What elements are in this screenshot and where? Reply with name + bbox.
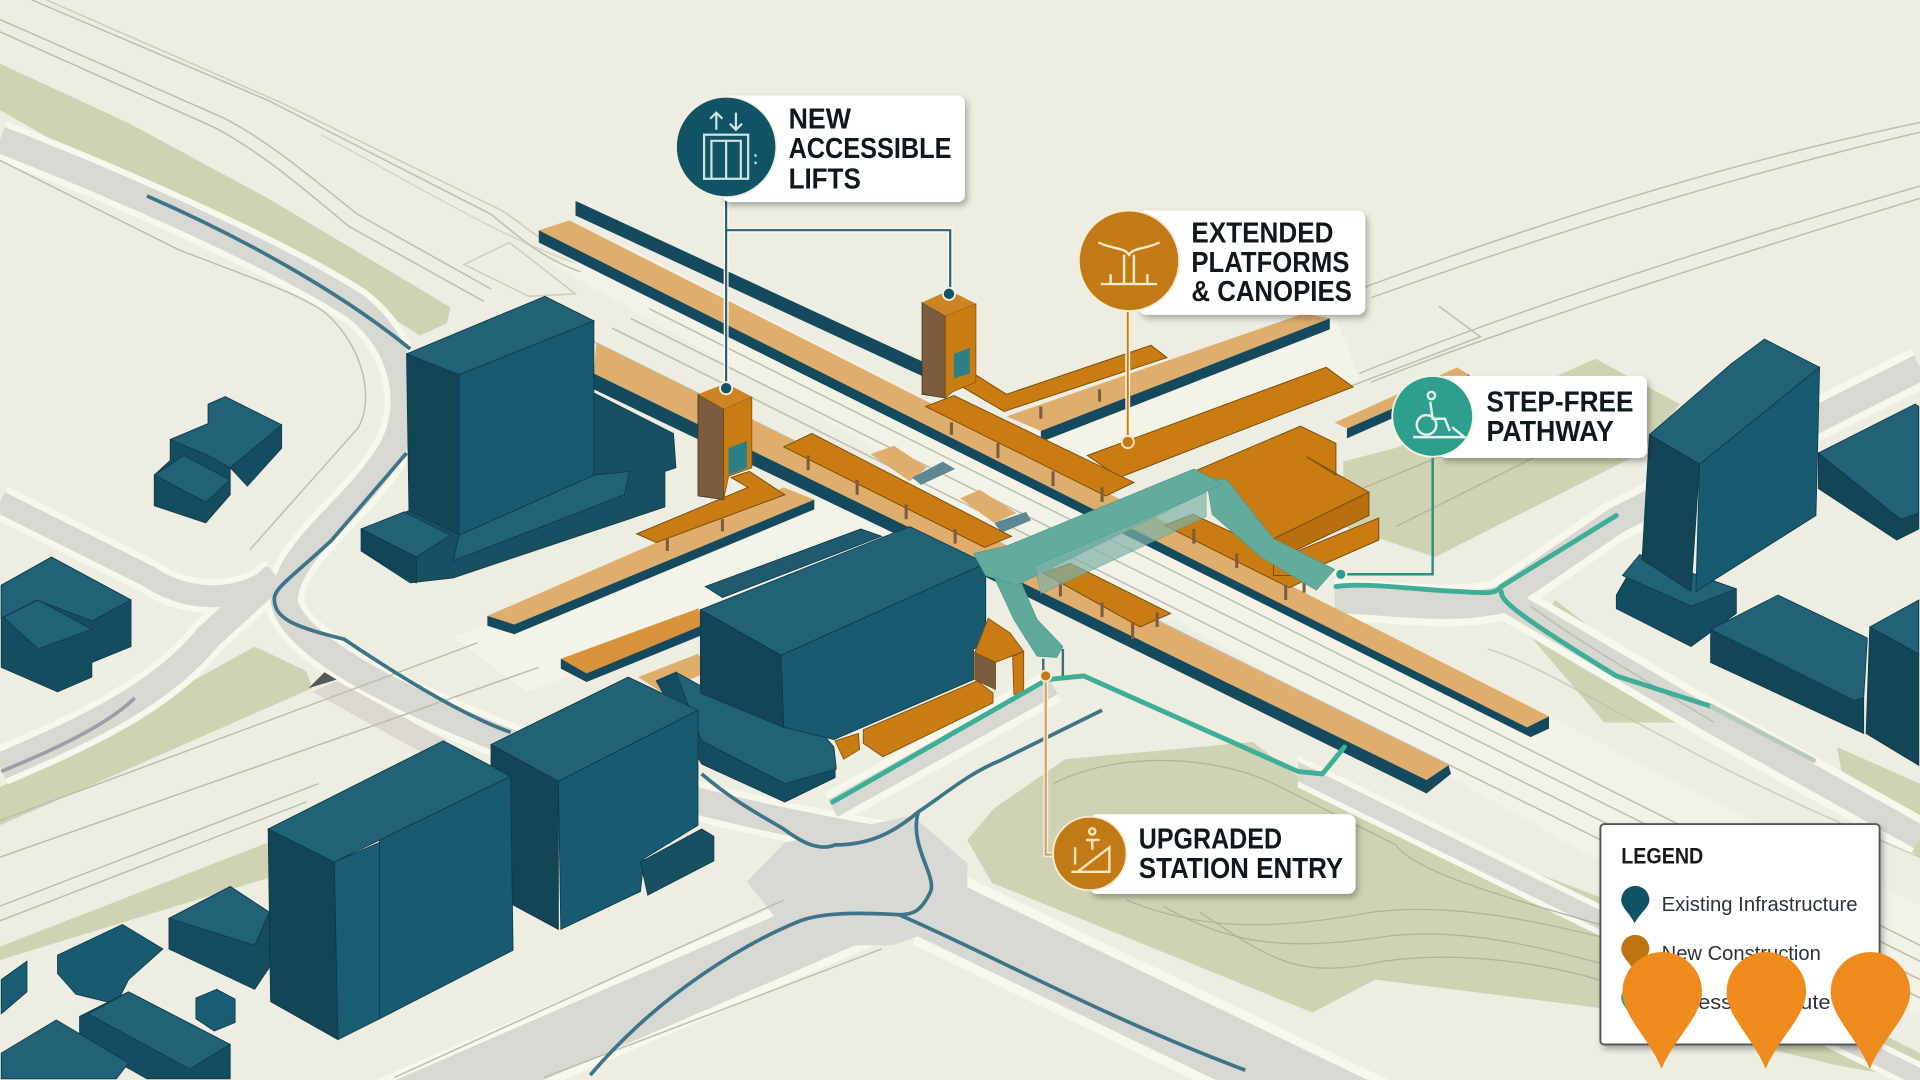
- leader line: [1126, 306, 1130, 438]
- teal pedestrian bridge: [973, 469, 1335, 676]
- platforms: [487, 201, 1549, 793]
- legend item: existing infrastructure: Existing Infrastructure: [1662, 894, 1858, 916]
- legend title: LEGEND: [1621, 843, 1703, 868]
- platform 1: [539, 220, 1549, 737]
- label card: [1139, 211, 1365, 315]
- building: tower north-west: [361, 296, 676, 583]
- leader dots: [720, 288, 955, 394]
- legend item: new construction: [1621, 935, 1821, 972]
- map pins: [1622, 952, 1910, 1069]
- rail corridor bed: [453, 245, 1920, 1016]
- building: south tower 1: [491, 677, 714, 929]
- leader line core: [1046, 681, 1056, 855]
- buildings: east blocks: [1711, 404, 1919, 765]
- label card: [1439, 376, 1647, 458]
- label text: PLATFORMS: [1191, 247, 1349, 279]
- step-free teal route: [833, 516, 1813, 802]
- legend box: [1600, 824, 1880, 1044]
- contour lines: [1053, 404, 1629, 986]
- legend: [1600, 824, 1880, 1044]
- lift tower 2: [922, 290, 976, 398]
- label card: [1090, 814, 1356, 894]
- label text: NEW: [789, 104, 852, 136]
- label text: EXTENDED: [1191, 217, 1333, 249]
- label text: UPGRADED: [1139, 824, 1282, 856]
- pin 3: [1831, 952, 1910, 1069]
- station block: [1194, 426, 1379, 576]
- callout: new accessible lifts: [676, 96, 965, 394]
- icon: wheelchair: [1392, 376, 1473, 457]
- canopies: [637, 345, 1353, 627]
- leader line: [1046, 681, 1056, 855]
- legend item: accessible route: [1621, 984, 1831, 1021]
- leader line halo: [726, 196, 950, 387]
- legend item: existing infrastructure: [1621, 886, 1858, 923]
- label text: LIFTS: [789, 164, 861, 196]
- buildings: south-west blocks: [1, 887, 269, 1079]
- leader dot: [1122, 436, 1134, 448]
- pin 2: [1727, 952, 1806, 1069]
- faded road line: [1, 698, 135, 771]
- callout: upgraded station entry: [1040, 670, 1356, 894]
- building: small west: [154, 397, 282, 523]
- cross platforms: [487, 313, 1469, 692]
- pin 1: [1622, 952, 1702, 1069]
- icon: station entry: [1053, 817, 1127, 890]
- label text: ACCESSIBLE: [789, 133, 951, 165]
- canopy posts: [667, 389, 1304, 639]
- callout: step-free pathway: [1335, 376, 1647, 580]
- leader dot: [1335, 569, 1346, 580]
- leader lines: [726, 196, 950, 387]
- pale road strip and marker: [309, 672, 447, 753]
- label text: STEP-FREE: [1487, 386, 1633, 418]
- station entrance block: [835, 618, 1024, 759]
- legend item: accessible route: Accessible Route: [1662, 992, 1831, 1014]
- icon: canopy: [1079, 211, 1179, 311]
- lift tower 1: [698, 383, 752, 500]
- building: west cluster: [1, 557, 131, 692]
- icon: lift: [676, 97, 776, 197]
- platform 2: [594, 343, 1451, 793]
- building: south tower 2: [268, 741, 513, 1040]
- rear dark strip: [576, 201, 924, 377]
- legend item: new construction: New Construction: [1662, 943, 1821, 965]
- label text: & CANOPIES: [1191, 276, 1352, 308]
- leader line: [1344, 453, 1433, 574]
- existing buildings: [1, 296, 1919, 1079]
- label text: PATHWAY: [1487, 416, 1614, 448]
- callout: extended platforms and canopies: [1079, 211, 1365, 448]
- leader line core: [1127, 306, 1129, 438]
- leader dot: [1040, 670, 1051, 681]
- blue road centre lines: [147, 196, 1245, 1075]
- central crossing: [871, 446, 1031, 533]
- label text: STATION ENTRY: [1139, 853, 1343, 885]
- road junction: [747, 816, 967, 945]
- building: east tower: [1616, 339, 1820, 647]
- label card: [722, 96, 965, 202]
- building: centre: [656, 527, 986, 802]
